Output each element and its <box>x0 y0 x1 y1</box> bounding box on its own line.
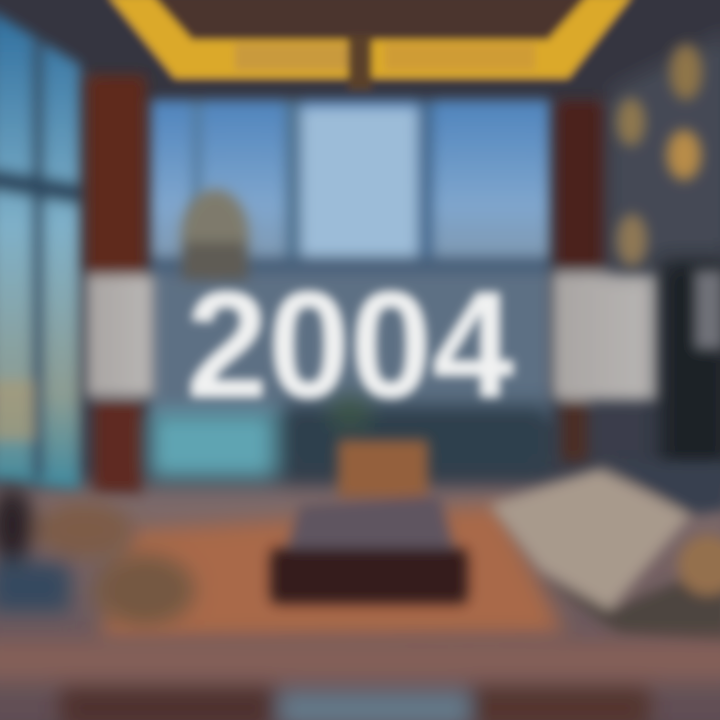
coffee table <box>270 440 468 604</box>
left armchair <box>0 487 195 626</box>
plants and balcony band <box>150 394 550 478</box>
right wall with lights <box>610 30 720 470</box>
right column <box>552 100 660 462</box>
right sofa <box>490 462 720 645</box>
central window <box>150 100 550 420</box>
rug <box>100 505 565 640</box>
floor <box>0 485 720 720</box>
dome building <box>181 189 249 281</box>
foreground table <box>0 640 720 720</box>
left window <box>0 10 80 490</box>
year text: 2004 <box>186 260 514 430</box>
left column <box>86 75 154 492</box>
ceiling with yellow frame <box>0 0 720 100</box>
